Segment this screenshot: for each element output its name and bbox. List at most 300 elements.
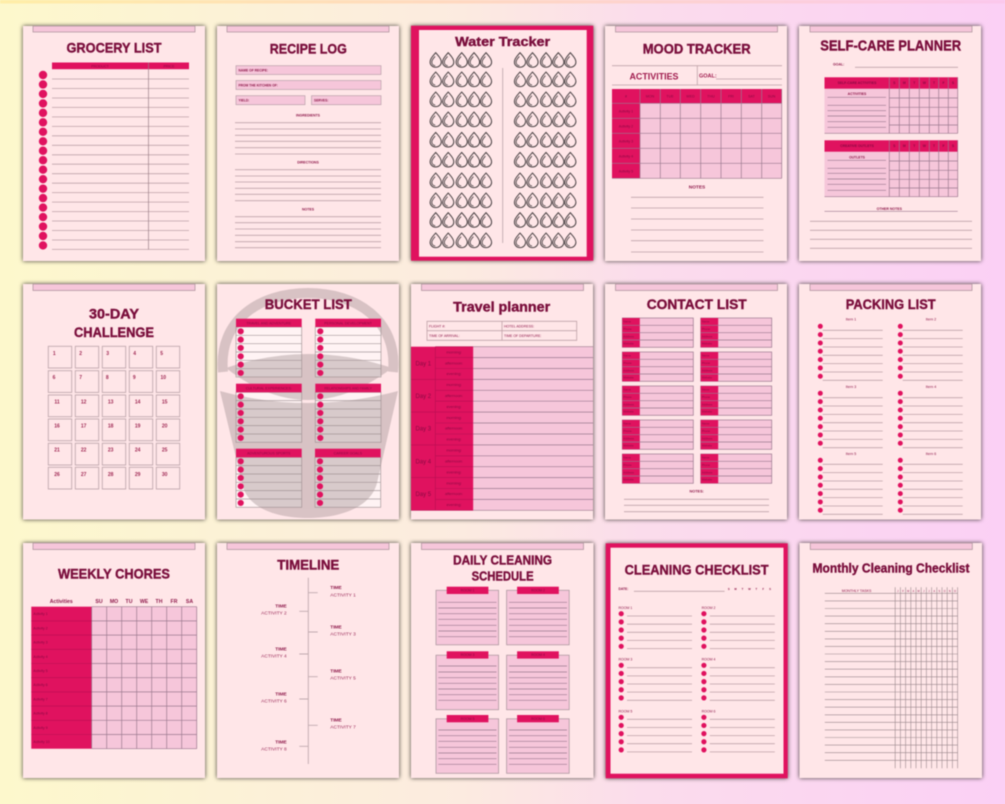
goal line	[833, 62, 958, 67]
contact cards grid: Phone	[623, 361, 632, 365]
heading: monthly cleaning checklist: Monthly Cleaning Checklist	[812, 560, 970, 575]
room 4	[507, 651, 569, 710]
contact cards grid: Address	[702, 470, 713, 474]
monthly task grid: S	[939, 589, 941, 593]
day boxes grid: 16	[54, 424, 60, 430]
contact cards grid: Phone	[702, 327, 710, 331]
room 6 list: ROOM 6	[702, 709, 715, 713]
category: relationships and family	[315, 384, 381, 439]
panel: weekly chores	[23, 543, 205, 778]
table: creative outlets: S	[952, 144, 955, 148]
trip details table: FLIGHT #:	[429, 324, 445, 328]
room 2: ROOM 2	[531, 589, 545, 593]
goal line: GOAL:	[833, 62, 844, 66]
table: self-care activities: ACTIVITIES	[848, 92, 867, 96]
monthly task grid	[825, 587, 958, 768]
monthly task grid: M	[918, 589, 920, 593]
day boxes grid: 5	[160, 351, 163, 357]
day boxes grid: 4	[133, 351, 136, 357]
column headers: TH	[156, 599, 163, 605]
category: adventurous sports: ADVENTUROUS SPORTS	[247, 452, 291, 456]
date row: S	[769, 587, 771, 591]
day boxes grid: 12	[81, 399, 87, 405]
category: relationships and family: RELATIONSHIPS AND FAMILY	[324, 387, 373, 391]
monthly task grid: D	[954, 589, 956, 593]
chores table: Activity 3	[33, 641, 48, 645]
category: adventurous sports	[236, 449, 302, 504]
list: item 5: Item 5	[846, 452, 856, 456]
day boxes grid: 24	[135, 448, 141, 454]
table: creative outlets: S	[893, 144, 896, 148]
table: self-care activities: T	[913, 81, 916, 85]
room 5	[436, 715, 499, 773]
table: self-care activities: T	[933, 81, 936, 85]
other notes: OTHER NOTES	[877, 207, 903, 211]
itinerary table: Day 5	[415, 492, 432, 498]
contact cards grid: Website	[702, 478, 712, 482]
room 1 list: ROOM 1	[618, 606, 632, 610]
heading: 30-day challenge: 30-DAY	[89, 305, 140, 321]
day boxes grid: 3	[106, 351, 109, 357]
table header	[52, 62, 189, 69]
panel: mood tracker	[605, 26, 787, 261]
timeline labels: left: TIME	[275, 604, 287, 610]
date row: F	[762, 587, 764, 591]
panel: daily cleaning schedule	[411, 543, 594, 778]
timeline labels: right: ACTIVITY 1	[330, 592, 356, 598]
timeline labels: right: ACTIVITY 3	[330, 631, 356, 637]
checklist row blocks	[236, 327, 381, 507]
room 1	[436, 587, 499, 645]
list: item 6: Item 6	[926, 452, 936, 456]
form fields: YIELD:	[238, 99, 249, 103]
monthly task grid: J	[928, 589, 930, 593]
room 3: ROOM 3	[461, 653, 474, 657]
itinerary table: evening:	[446, 469, 462, 474]
day boxes grid: 6	[53, 375, 56, 381]
contact cards grid: Name	[702, 422, 709, 426]
chores table: Activity 2	[33, 626, 48, 630]
notes	[631, 184, 764, 252]
activities and goal row	[612, 66, 782, 85]
trip details table: HOTEL ADDRESS:	[504, 324, 534, 328]
day boxes grid: 15	[162, 399, 168, 405]
day boxes grid: 14	[135, 399, 141, 405]
table header: PRICE	[164, 64, 175, 68]
contact cards grid: Address	[623, 402, 634, 406]
heading: contact list: CONTACT LIST	[647, 296, 747, 312]
mood table: WED	[686, 95, 695, 99]
mood table: #	[625, 95, 627, 99]
mood table: SAT	[748, 95, 756, 99]
day boxes grid: 1	[53, 351, 56, 357]
day boxes grid: 29	[135, 472, 141, 478]
day boxes grid: 30	[162, 472, 168, 478]
table: creative outlets: OUTLETS	[849, 156, 866, 160]
monthly task grid: M	[907, 589, 909, 593]
timeline labels: left: ACTIVITY 4	[261, 654, 287, 660]
day boxes grid: 23	[108, 448, 114, 454]
panel: recipe log	[217, 26, 399, 261]
itinerary table: Day 3	[415, 426, 432, 432]
table: creative outlets: CREATIVE OUTLETS	[840, 144, 875, 148]
notes: NOTES	[689, 184, 706, 190]
date row: M	[734, 587, 737, 591]
contact cards grid: Address	[702, 334, 713, 338]
date row: W	[748, 587, 751, 591]
contact cards grid: Phone	[623, 429, 632, 433]
chores table	[31, 607, 197, 749]
category: cultural experiences: CULTURAL EXPERIENCES:	[246, 387, 292, 391]
contact cards grid: Address	[702, 436, 713, 440]
section: directions	[235, 160, 381, 201]
heading: daily cleaning schedule	[453, 552, 552, 584]
column headers: MO	[110, 599, 118, 605]
heading: self-care planner: SELF-CARE PLANNER	[820, 39, 962, 55]
list: item 1: Item 1	[846, 318, 856, 322]
monthly task grid: J	[923, 589, 925, 593]
monthly task grid: MONTHLY TASKS	[842, 589, 872, 593]
itinerary table: afternoon:	[445, 458, 463, 464]
day boxes grid: 20	[162, 424, 168, 430]
timeline labels: left: TIME	[275, 692, 287, 698]
contact cards grid: Website	[623, 410, 634, 414]
monthly task grid: O	[944, 589, 946, 593]
panel: packing list	[799, 284, 981, 520]
panel: 30-day challenge	[23, 284, 205, 520]
table: creative outlets: F	[942, 144, 945, 148]
room 4: ROOM 4	[531, 653, 545, 657]
timeline labels: right: TIME	[330, 585, 343, 591]
chores table: Activity 9	[33, 726, 48, 730]
category: cultural experiences	[236, 384, 302, 439]
list: item 3	[820, 385, 883, 448]
list: item 5	[820, 452, 883, 514]
monthly task grid: J	[897, 589, 899, 593]
heading: grocery list: GROCERY LIST	[66, 40, 162, 56]
chores table: Activity 6	[33, 683, 48, 687]
room 1 list	[618, 606, 692, 649]
day boxes grid: 17	[81, 424, 87, 430]
room 5: ROOM 5	[461, 717, 474, 721]
mood table: Activity 2	[619, 124, 633, 128]
contact cards grid: Name	[623, 456, 631, 460]
category: career goals: CAREER GOALS	[334, 452, 363, 456]
heading: timeline: TIMELINE	[277, 556, 339, 572]
room 2 list	[702, 606, 775, 649]
form fields: NAME OF RECIPE:	[238, 68, 268, 72]
list: item 2: Item 2	[926, 318, 936, 322]
checklist rows	[43, 62, 189, 250]
date row: DATE:	[618, 587, 628, 591]
mood table: FRI	[728, 95, 734, 99]
table header: PRODUCT	[91, 64, 110, 68]
table: self-care activities: M	[903, 81, 906, 85]
section: ingredients	[235, 114, 381, 154]
mood table: Activity 3	[619, 139, 633, 143]
timeline labels: right	[330, 585, 356, 730]
room 3	[436, 651, 499, 710]
heading: daily cleaning schedule: SCHEDULE	[472, 569, 534, 584]
contact cards grid: Website	[702, 410, 712, 414]
activities and goal row: ACTIVITIES	[630, 71, 678, 81]
itinerary table: evening:	[446, 502, 462, 507]
table: creative outlets: W	[923, 144, 927, 148]
timeline labels: right: ACTIVITY 5	[330, 676, 356, 682]
contact cards grid: Address	[623, 334, 634, 338]
column headers: SA	[186, 599, 193, 605]
table: self-care activities: W	[923, 81, 927, 85]
itinerary table: evening:	[446, 371, 462, 376]
itinerary table: afternoon:	[445, 360, 463, 365]
day boxes grid: 22	[81, 448, 87, 454]
mood table	[612, 89, 782, 178]
contact cards grid: Name	[623, 422, 631, 426]
timeline labels: left: ACTIVITY 8	[261, 747, 287, 753]
table: self-care activities: SELF-CARE ACTIVITIES	[838, 81, 877, 85]
category: career goals	[315, 449, 381, 504]
heading: recipe log: RECIPE LOG	[270, 40, 347, 56]
panel: monthly cleaning checklist	[800, 543, 982, 778]
itinerary table: afternoon:	[445, 491, 463, 496]
panel: self-care planner	[799, 26, 981, 261]
contact cards grid: Website	[623, 444, 634, 448]
list: item 2	[900, 318, 963, 380]
mood table: Activity 5	[619, 169, 633, 173]
room 2	[507, 587, 569, 645]
notes	[624, 490, 769, 512]
itinerary table: morning:	[446, 480, 462, 485]
day boxes grid: 28	[108, 472, 114, 478]
column headers: Activities	[50, 599, 73, 605]
itinerary table: evening:	[446, 437, 462, 442]
itinerary table: afternoon:	[445, 393, 463, 398]
list: item 4: Item 4	[926, 385, 936, 389]
contact cards grid: Website	[702, 444, 712, 448]
itinerary table: morning:	[446, 415, 462, 420]
contact cards grid: Phone	[702, 429, 710, 433]
chores table: Activity 5	[33, 669, 48, 673]
contact cards grid: Name	[702, 354, 709, 358]
column headers: WE	[140, 599, 149, 605]
contact cards grid: Address	[702, 368, 713, 372]
section: notes: NOTES	[302, 208, 315, 212]
panel: grocery list	[23, 26, 205, 261]
heading: weekly chores: WEEKLY CHORES	[58, 565, 170, 581]
contact cards grid: Address	[623, 436, 634, 440]
day boxes grid: 7	[79, 375, 82, 381]
timeline axis	[299, 578, 318, 764]
category: personal development: PERSONAL DEVELOPMENT	[324, 322, 373, 326]
mood table: Activity 4	[619, 154, 633, 158]
other notes	[810, 207, 972, 248]
itinerary table	[411, 347, 593, 510]
room 1: ROOM 1	[461, 589, 474, 593]
form fields: FROM THE KITCHEN OF:	[238, 83, 278, 87]
timeline labels: right: TIME	[330, 669, 343, 675]
contact cards grid: Website	[623, 376, 634, 380]
trip details table: TIME OF ARRIVAL:	[429, 334, 460, 338]
timeline labels: left: ACTIVITY 6	[261, 699, 287, 705]
list: item 1	[820, 318, 883, 380]
icon: bucket watermark	[220, 293, 398, 518]
list: item 4	[900, 385, 963, 448]
timeline labels: left: TIME	[275, 740, 287, 746]
itinerary table: evening:	[446, 404, 462, 409]
heading: mood tracker: MOOD TRACKER	[643, 40, 751, 56]
panel: cleaning checklist	[606, 543, 788, 778]
contact cards grid: Phone	[623, 327, 632, 331]
room 6: ROOM 6	[531, 717, 545, 721]
section: ingredients: INGREDIENTS	[296, 114, 321, 118]
form fields: SERVES:	[314, 99, 328, 103]
date row: T	[755, 587, 757, 591]
contact cards grid: Phone	[702, 463, 710, 467]
table: creative outlets: M	[903, 144, 906, 148]
category: personal development	[315, 319, 381, 374]
column headers: TU	[126, 599, 133, 605]
heading: bucket list: BUCKET LIST	[265, 296, 352, 312]
contact cards grid: Website	[623, 478, 634, 482]
trip details table	[427, 321, 577, 340]
contact cards grid: Website	[623, 342, 634, 346]
date row: T	[742, 587, 744, 591]
contact cards grid: Website	[702, 376, 712, 380]
room 3 list	[618, 658, 692, 700]
column headers: FR	[171, 599, 178, 605]
date row	[618, 587, 771, 591]
chores table: Activity 10	[33, 740, 50, 744]
contact cards grid: Phone	[623, 395, 632, 399]
table: self-care activities: S	[893, 81, 896, 85]
room 6	[507, 715, 569, 773]
list: item 6	[900, 452, 963, 514]
heading: 30-day challenge	[74, 305, 154, 340]
table: self-care activities: S	[952, 81, 955, 85]
chores table: Activity 7	[33, 697, 48, 701]
contact cards grid: Name	[623, 354, 631, 358]
chores table: Activity 4	[33, 655, 48, 659]
section: notes	[235, 208, 381, 248]
contact cards grid: Address	[623, 368, 634, 372]
day boxes grid: 8	[106, 375, 109, 381]
heading: 30-day challenge: CHALLENGE	[74, 324, 154, 340]
contact cards grid: Name	[623, 320, 631, 324]
contact cards grid: Address	[623, 470, 634, 474]
contact cards grid: Name	[702, 388, 709, 392]
timeline labels: right: TIME	[330, 717, 343, 723]
room 2 list: ROOM 2	[702, 606, 715, 610]
heading: water tracker: Water Tracker	[455, 35, 550, 49]
column headers	[50, 599, 193, 605]
day boxes grid: 25	[162, 448, 168, 454]
itinerary table: Day 2	[415, 394, 432, 400]
trip details table: TIME OF DEPARTURE:	[504, 334, 541, 338]
day boxes grid: 2	[79, 351, 82, 357]
itinerary table: Day 4	[415, 460, 432, 466]
monthly task grid: N	[949, 589, 951, 593]
contact cards grid: Phone	[702, 361, 710, 365]
contact cards grid: Phone	[623, 463, 632, 467]
mood table: TUE	[666, 95, 674, 99]
top gradient strip	[0, 0, 1005, 4]
mood table: SUN	[768, 95, 776, 99]
table: creative outlets: T	[913, 144, 916, 148]
mood table: THU	[707, 95, 715, 99]
day boxes grid: 26	[54, 472, 60, 478]
timeline labels: left	[261, 604, 287, 753]
mood table: MON	[646, 95, 655, 99]
day boxes grid: 10	[161, 375, 166, 381]
monthly task grid: A	[933, 589, 935, 593]
itinerary table: Day 1	[415, 361, 432, 367]
column headers: SU	[95, 599, 103, 605]
room 5 list: ROOM 5	[618, 709, 632, 713]
day boxes grid: 18	[108, 424, 114, 430]
day boxes grid: 11	[54, 399, 60, 405]
heading: daily cleaning schedule: DAILY CLEANING	[453, 552, 552, 567]
category: travel and adventure: TRAVEL AND ADVENTURE	[246, 322, 292, 326]
panel: timeline	[217, 543, 399, 778]
day boxes grid: 13	[108, 399, 114, 405]
room 5 list	[618, 709, 692, 752]
room 4 list: ROOM 4	[702, 658, 715, 662]
category: travel and adventure	[236, 319, 302, 374]
panel: bucket list	[217, 284, 399, 520]
itinerary table: morning:	[446, 448, 462, 453]
itinerary table: morning:	[446, 349, 462, 354]
contact cards grid: Name	[623, 388, 631, 392]
day boxes grid: 27	[81, 472, 87, 478]
timeline labels: right: TIME	[330, 624, 343, 630]
mood table: Activity 1	[619, 109, 633, 113]
contact cards grid: Phone	[702, 395, 710, 399]
timeline labels: right: ACTIVITY 7	[330, 724, 356, 730]
heading: cleaning checklist: CLEANING CHECKLIST	[625, 561, 769, 577]
table: self-care activities	[824, 77, 958, 133]
table: creative outlets	[824, 140, 958, 197]
date row: S	[728, 587, 730, 591]
table: creative outlets: T	[933, 144, 936, 148]
day boxes grid: 21	[54, 448, 60, 454]
chores table: Activity 1	[33, 612, 48, 616]
room 4 list	[702, 658, 775, 700]
contact cards grid: Website	[702, 342, 712, 346]
icons: water drops grid	[430, 53, 576, 248]
timeline labels: left: ACTIVITY 2	[261, 611, 287, 617]
form fields	[236, 66, 381, 105]
day boxes grid: 19	[135, 424, 141, 430]
contact cards grid: Address	[702, 402, 713, 406]
contact cards grid: Name	[702, 456, 709, 460]
panel: contact list	[605, 284, 787, 520]
day boxes grid: 9	[133, 375, 136, 381]
itinerary table: afternoon:	[445, 426, 463, 431]
section: directions: DIRECTIONS	[297, 160, 319, 164]
table: self-care activities: F	[942, 81, 945, 85]
chores table: Activity 8	[33, 712, 48, 716]
contact cards grid	[622, 318, 772, 483]
panel: travel planner	[411, 284, 593, 520]
itinerary table: morning:	[446, 382, 462, 387]
contact cards grid: Name	[702, 320, 709, 324]
room 3 list: ROOM 3	[618, 658, 632, 662]
notes: NOTES:	[690, 490, 704, 494]
monthly task grid: A	[913, 589, 915, 593]
day boxes grid	[48, 346, 180, 489]
monthly task grid: F	[902, 589, 904, 593]
heading: travel planner: Travel planner	[453, 299, 551, 315]
